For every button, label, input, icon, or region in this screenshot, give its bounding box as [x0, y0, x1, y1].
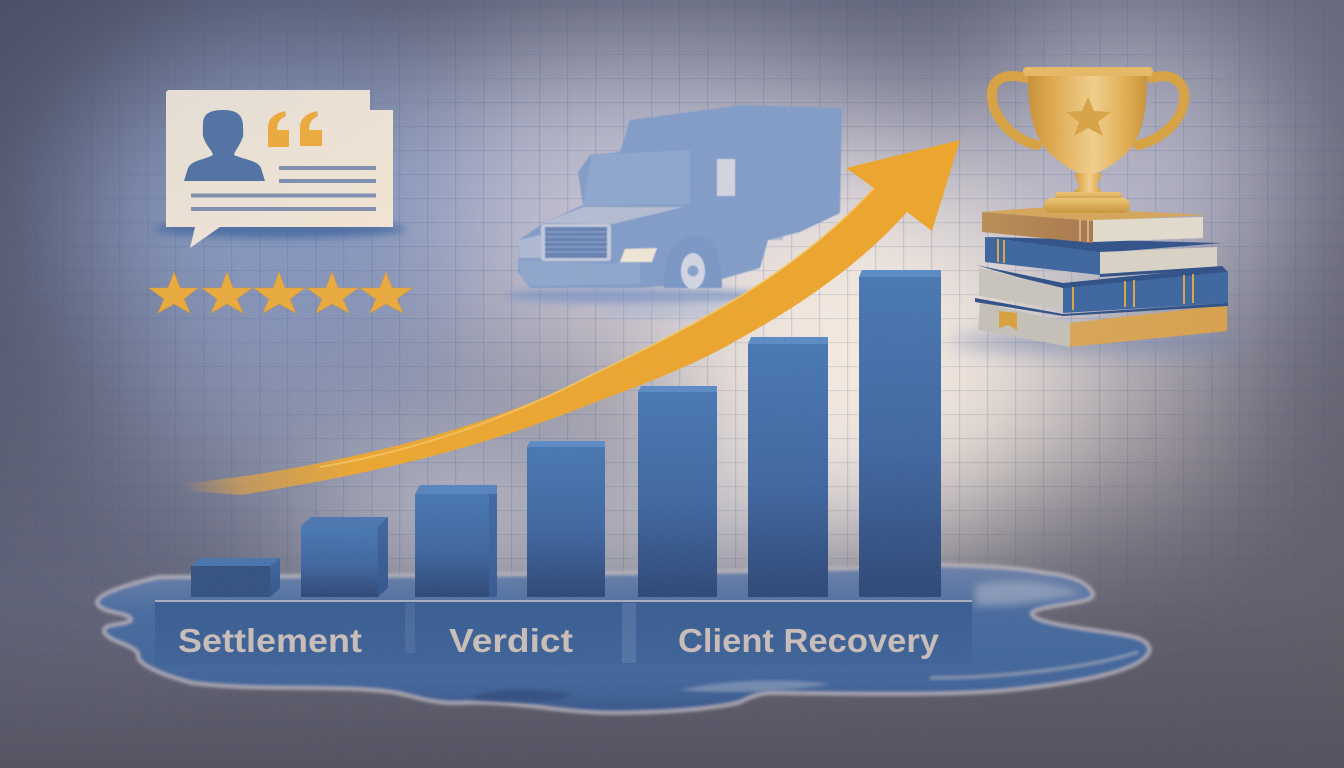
label: settlement: Settlement	[178, 622, 362, 659]
bar 4	[527, 441, 605, 597]
puddle reflection	[97, 565, 1150, 713]
trophy handles	[992, 76, 1184, 145]
headlight	[620, 248, 657, 262]
cargo shading	[755, 112, 783, 240]
bar 6	[748, 337, 828, 597]
trophy stem	[1072, 173, 1104, 194]
label: client recovery: Client Recovery	[678, 622, 940, 659]
book stack shadow	[950, 330, 1250, 354]
bar 7	[859, 270, 941, 597]
testimonial text lines	[191, 166, 376, 211]
speech bubble card	[166, 90, 393, 248]
bar 3	[415, 485, 497, 597]
label: verdict: Verdict	[449, 622, 573, 659]
book 3: blue with pages left	[975, 265, 1228, 316]
bar 2	[301, 517, 388, 597]
truck ground shadow	[505, 288, 780, 320]
bar 5	[638, 386, 717, 597]
trophy base	[1044, 192, 1130, 213]
book 1: top tan	[982, 207, 1207, 243]
icon: trophy on books	[950, 67, 1250, 354]
book 2: blue with pages right	[985, 237, 1223, 277]
fender	[519, 235, 545, 258]
wheel	[664, 236, 722, 289]
card shadow	[154, 220, 406, 238]
windshield	[583, 150, 690, 206]
cargo box and cab body	[518, 105, 842, 288]
trophy star	[1066, 97, 1111, 136]
bumper	[519, 250, 640, 286]
book 4: bottom tan	[978, 302, 1227, 347]
bar chart	[97, 270, 1150, 713]
icon: faded truck	[505, 105, 842, 320]
grille	[541, 224, 611, 261]
trophy rim	[1023, 67, 1153, 76]
hood	[542, 207, 683, 224]
trophy cup	[1028, 75, 1147, 174]
side window	[717, 159, 735, 196]
testimonial card with rating	[149, 90, 412, 313]
icon: person silhouette	[184, 110, 265, 181]
base plinth	[155, 600, 972, 665]
five star rating	[149, 272, 412, 313]
bar 1	[191, 558, 280, 597]
icon: quotation marks	[268, 111, 322, 147]
arrow: rising growth trend	[180, 140, 960, 495]
